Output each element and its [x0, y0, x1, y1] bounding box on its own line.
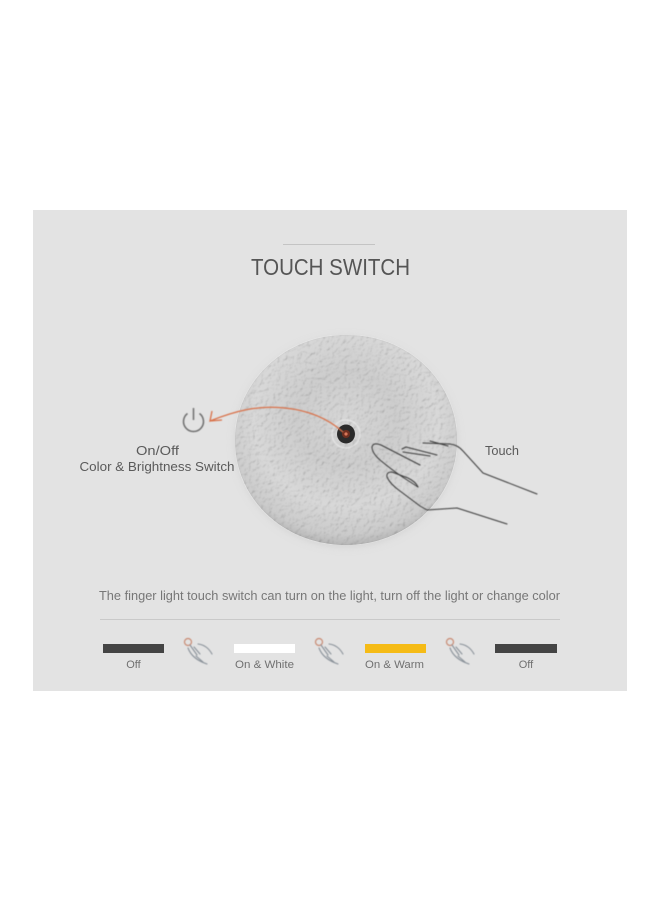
- state: on and white: [234, 644, 295, 671]
- icon: tap hand 3: [446, 638, 474, 664]
- label: on/off color and brightness switch: [80, 443, 234, 474]
- illustration: hand outline touching the moon: [372, 441, 537, 524]
- state: on and warm: [365, 644, 426, 671]
- label: on/off color and brightness switch: On/Off: [136, 443, 179, 458]
- moon lamp sphere with touch button: [235, 335, 457, 547]
- caption: finger light touch description: The finger light touch switch can turn on the light, turn off the light or change color: [99, 588, 561, 603]
- panel: touch switch background: [33, 210, 627, 691]
- arrow: orange curve from button to power icon: [210, 407, 343, 432]
- state: off: [103, 644, 164, 671]
- icon: tap hand 1: [184, 638, 212, 664]
- label: touch: Touch: [485, 443, 519, 458]
- state: on and warm: On & Warm: [365, 659, 424, 671]
- state: off: [495, 644, 557, 671]
- icon: tap hand 2: [316, 638, 343, 664]
- heading: touch switch: TOUCH SWITCH: [251, 254, 410, 280]
- state: off: Off: [519, 659, 534, 671]
- label: on/off color and brightness switch: Color & Brightness Switch: [80, 459, 234, 474]
- state: off: Off: [126, 659, 142, 671]
- icon: touch button: [337, 424, 355, 444]
- state: on and white: On & White: [235, 659, 294, 671]
- icon: power symbol: [184, 408, 204, 432]
